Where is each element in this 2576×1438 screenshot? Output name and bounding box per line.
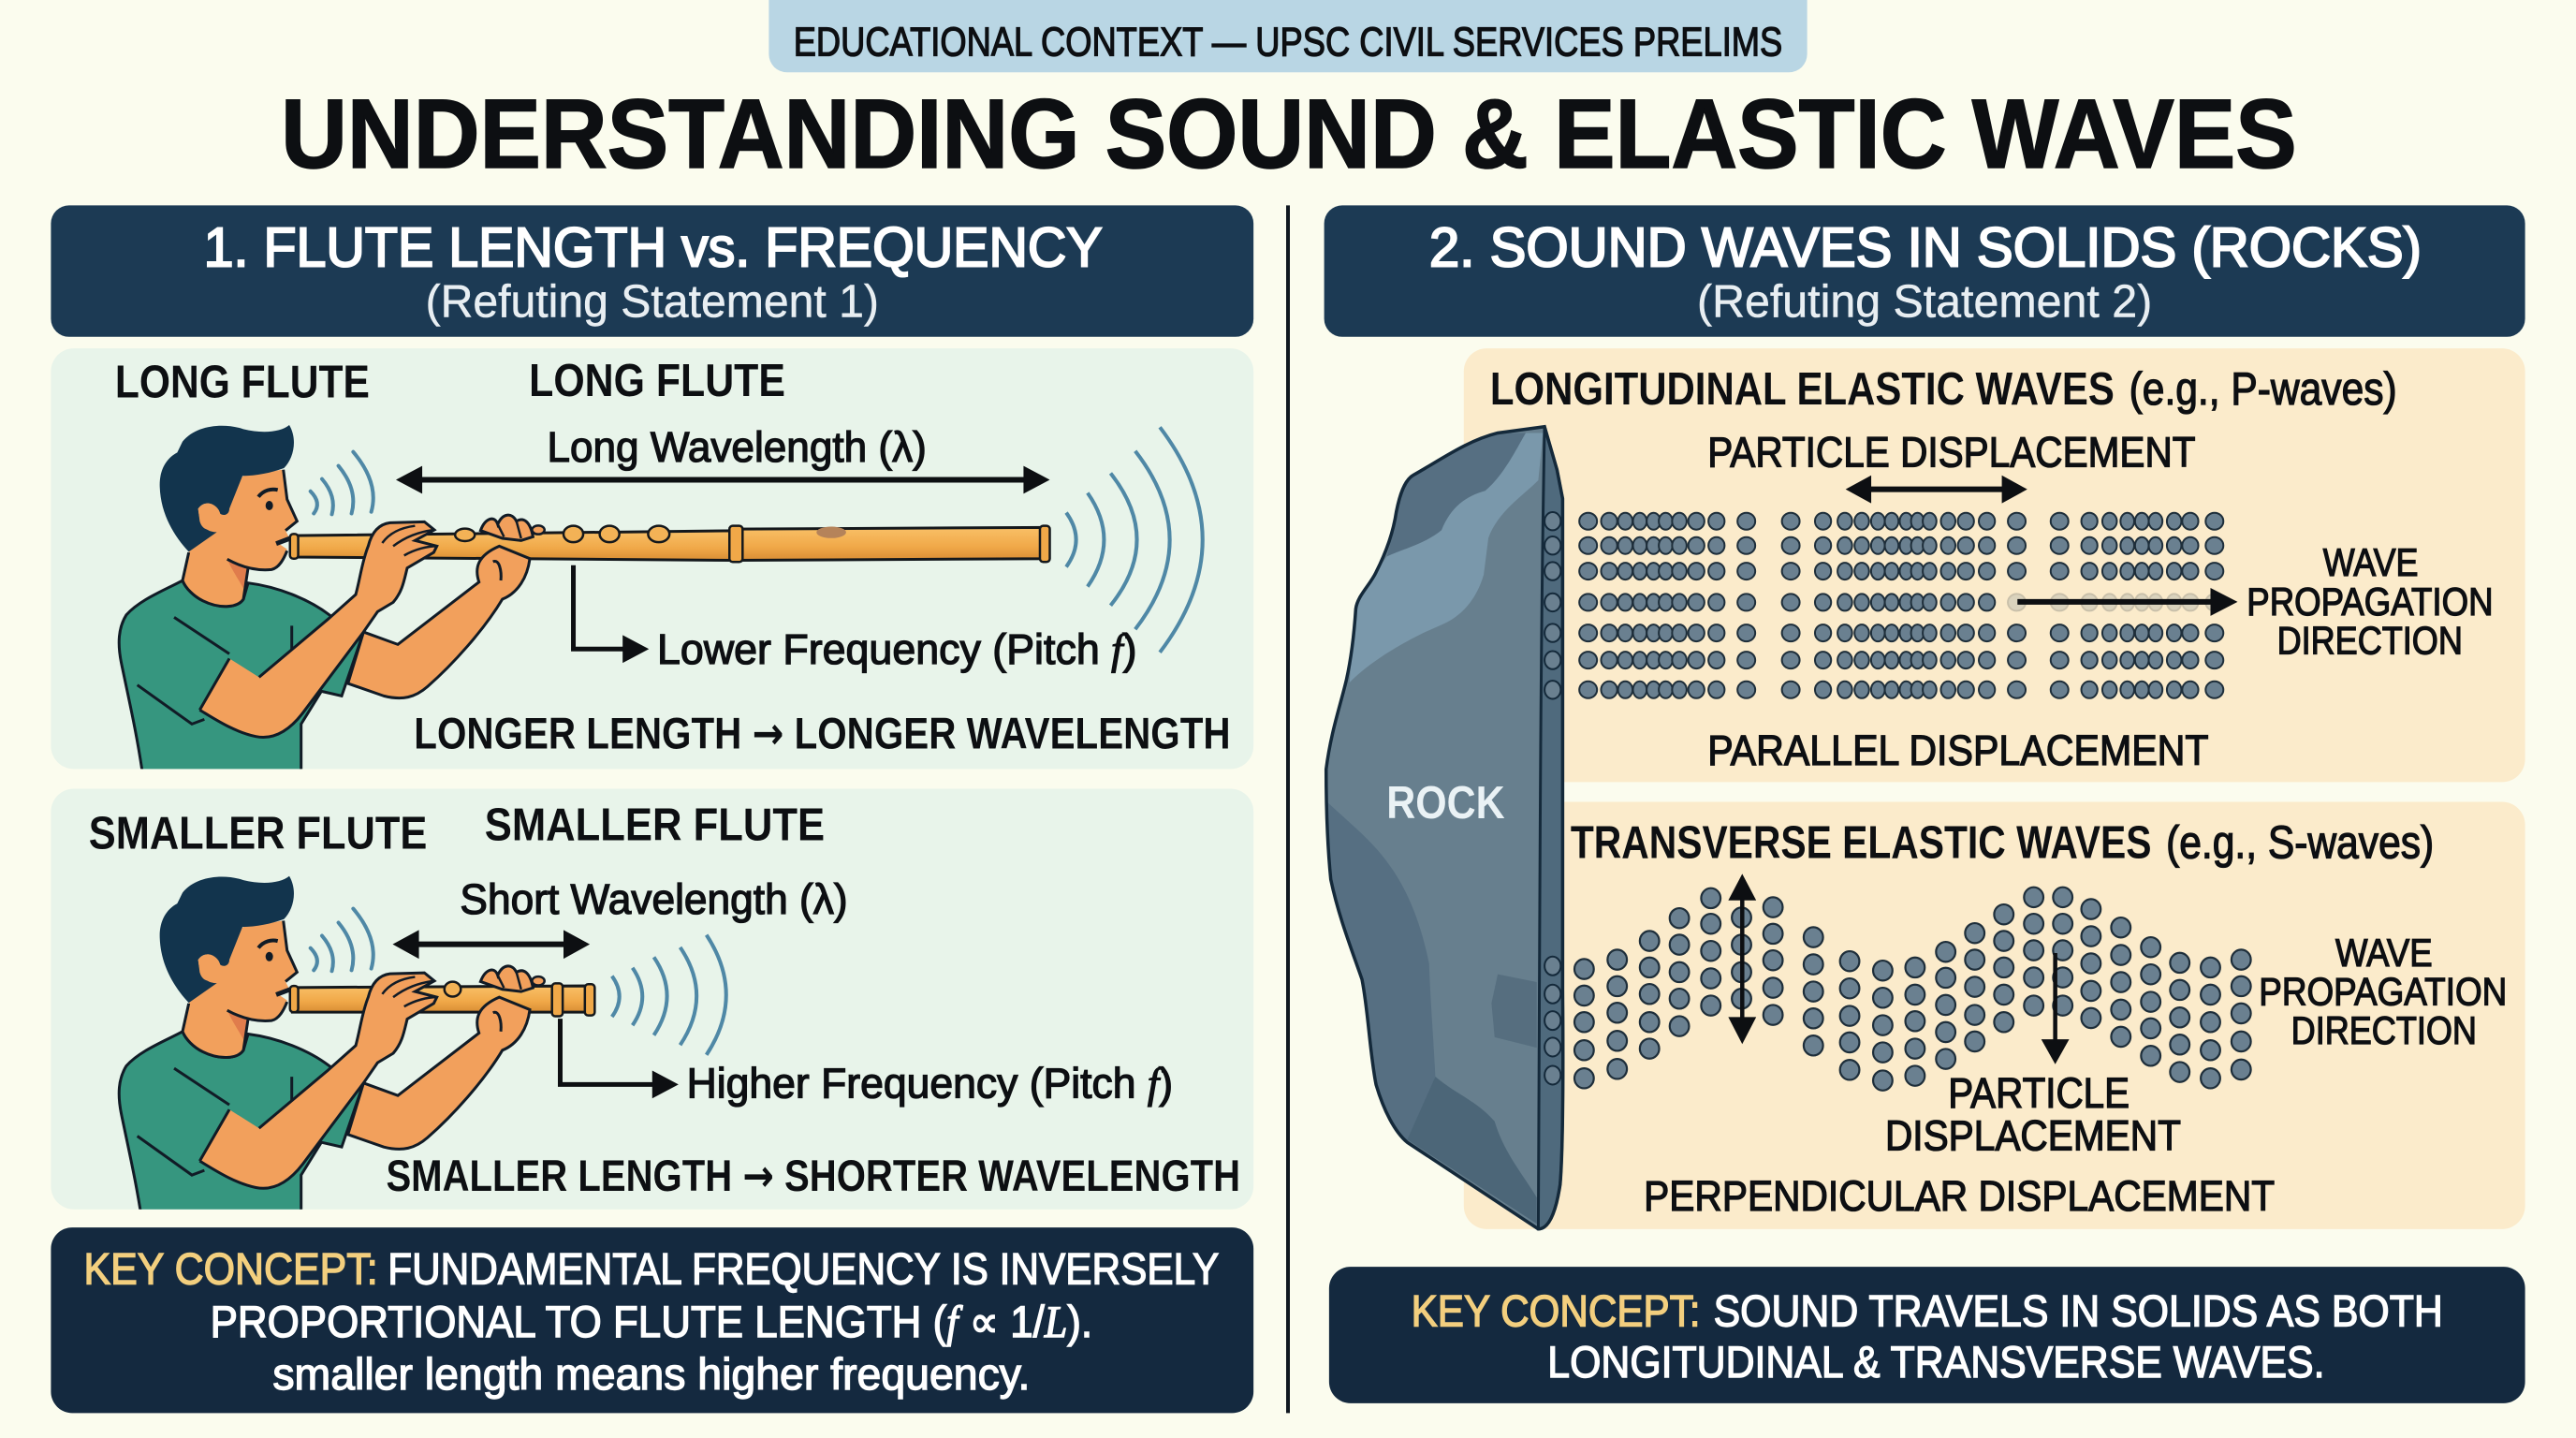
header: sound waves in solids: (Refuting Statement 2) <box>1697 277 2152 328</box>
parallel displacement label: PARALLEL DISPLACEMENT <box>1707 726 2209 774</box>
particle displacement label: PARTICLE <box>1948 1069 2130 1117</box>
higher frequency label: Higher Frequency (Pitch f) <box>687 1059 1173 1107</box>
callout: key concept flute: FUNDAMENTAL FREQUENCY IS INVERSELY <box>388 1245 1219 1295</box>
wave propagation label <box>2247 540 2494 663</box>
callout: key concept flute: KEY CONCEPT: <box>84 1245 378 1295</box>
elbow arrow to lower frequency <box>574 565 649 663</box>
header: flute length vs frequency: 1. FLUTE LENGTH vs. FREQUENCY <box>204 215 1103 278</box>
callout: key concept solids <box>1329 1267 2525 1403</box>
header: flute length vs frequency <box>51 205 1253 337</box>
wave propagation label: PROPAGATION <box>2247 580 2494 624</box>
heading: transverse: TRANSVERSE ELASTIC WAVES <box>1571 818 2151 869</box>
rock label: ROCK <box>1386 778 1505 829</box>
longer length caption: LONGER LENGTH → LONGER WAVELENGTH <box>414 708 1231 759</box>
header: flute length vs frequency: (Refuting Statement 1) <box>426 277 879 328</box>
callout: key concept flute: PROPORTIONAL TO FLUTE LENGTH (f ∝ 1/L). <box>211 1298 1092 1347</box>
wave propagation label: WAVE <box>2323 540 2419 584</box>
panel: long flute <box>51 348 1253 774</box>
header: sound waves in solids: 2. SOUND WAVES IN SOLIDS (ROCKS) <box>1429 215 2422 278</box>
hollow particles on rock face <box>1544 512 1560 698</box>
heading: longitudinal: (e.g., P-waves) <box>2130 364 2397 415</box>
short wavelength arrow <box>392 930 590 959</box>
particle displacement label: DISPLACEMENT <box>1885 1112 2181 1160</box>
panel: longitudinal waves <box>1464 348 2525 782</box>
perpendicular displacement label: PERPENDICULAR DISPLACEMENT <box>1644 1172 2275 1220</box>
wave propagation label: DIRECTION <box>2291 1008 2477 1052</box>
heading: smaller flute left: SMALLER FLUTE <box>89 809 427 859</box>
short flute <box>290 982 594 1017</box>
heading: transverse: (e.g., S-waves) <box>2166 818 2434 869</box>
heading: smaller flute center: SMALLER FLUTE <box>485 800 825 851</box>
wave propagation label: DIRECTION <box>2277 619 2463 663</box>
center divider <box>1286 205 1290 1413</box>
panel: smaller flute <box>51 788 1253 1225</box>
wave propagation label: WAVE <box>2335 931 2433 975</box>
wavelength label: Short Wavelength (λ) <box>460 875 848 923</box>
callout: key concept flute: smaller length means higher frequency. <box>272 1350 1030 1400</box>
wave propagation label <box>2259 931 2507 1052</box>
particle displacement label: PARTICLE DISPLACEMENT <box>1707 428 2196 476</box>
callout: key concept solids: KEY CONCEPT: <box>1412 1286 1701 1336</box>
callout: key concept solids: LONGITUDINAL & TRANSVERSE WAVES. <box>1547 1338 2324 1387</box>
wave propagation label: PROPAGATION <box>2259 969 2507 1013</box>
horizontal double arrow <box>1846 476 2027 504</box>
top context tag: EDUCATIONAL CONTEXT — UPSC CIVIL SERVICES PRELIMS <box>794 20 1782 66</box>
elbow arrow to higher frequency <box>560 1019 679 1098</box>
callout: key concept flute <box>51 1227 1253 1413</box>
lower frequency label: Lower Frequency (Pitch f) <box>657 625 1137 673</box>
heading: long flute left: LONG FLUTE <box>115 358 370 408</box>
particle rows <box>1579 513 2223 698</box>
wavelength double arrow <box>396 466 1050 493</box>
sound arcs at mouth <box>311 452 373 514</box>
figure: person playing short flute <box>119 876 594 1225</box>
sound arcs at flute end <box>1066 427 1203 653</box>
smaller length caption: SMALLER LENGTH → SHORTER WAVELENGTH <box>386 1151 1240 1202</box>
sound arcs at flute end <box>612 935 726 1055</box>
callout: key concept solids: SOUND TRAVELS IN SOLIDS AS BOTH <box>1714 1286 2443 1336</box>
downward arrow <box>2042 953 2070 1064</box>
wave particles <box>1574 888 2251 1091</box>
title: UNDERSTANDING SOUND & ELASTIC WAVES <box>281 80 2297 189</box>
rock <box>1326 427 1563 1229</box>
propagation arrow <box>2017 588 2237 616</box>
sound arcs at mouth <box>311 909 373 971</box>
panel: transverse waves <box>1464 801 2525 1229</box>
top context tag <box>768 0 1808 72</box>
header: sound waves in solids <box>1325 205 2525 337</box>
wavelength label: Long Wavelength (λ) <box>547 423 927 471</box>
vertical double arrow <box>1728 873 1756 1044</box>
long flute <box>290 526 1050 562</box>
heading: longitudinal: LONGITUDINAL ELASTIC WAVES <box>1490 364 2115 415</box>
particle displacement label <box>1885 1069 2181 1160</box>
heading: long flute center: LONG FLUTE <box>529 356 785 406</box>
figure: person playing long flute <box>119 425 1050 774</box>
